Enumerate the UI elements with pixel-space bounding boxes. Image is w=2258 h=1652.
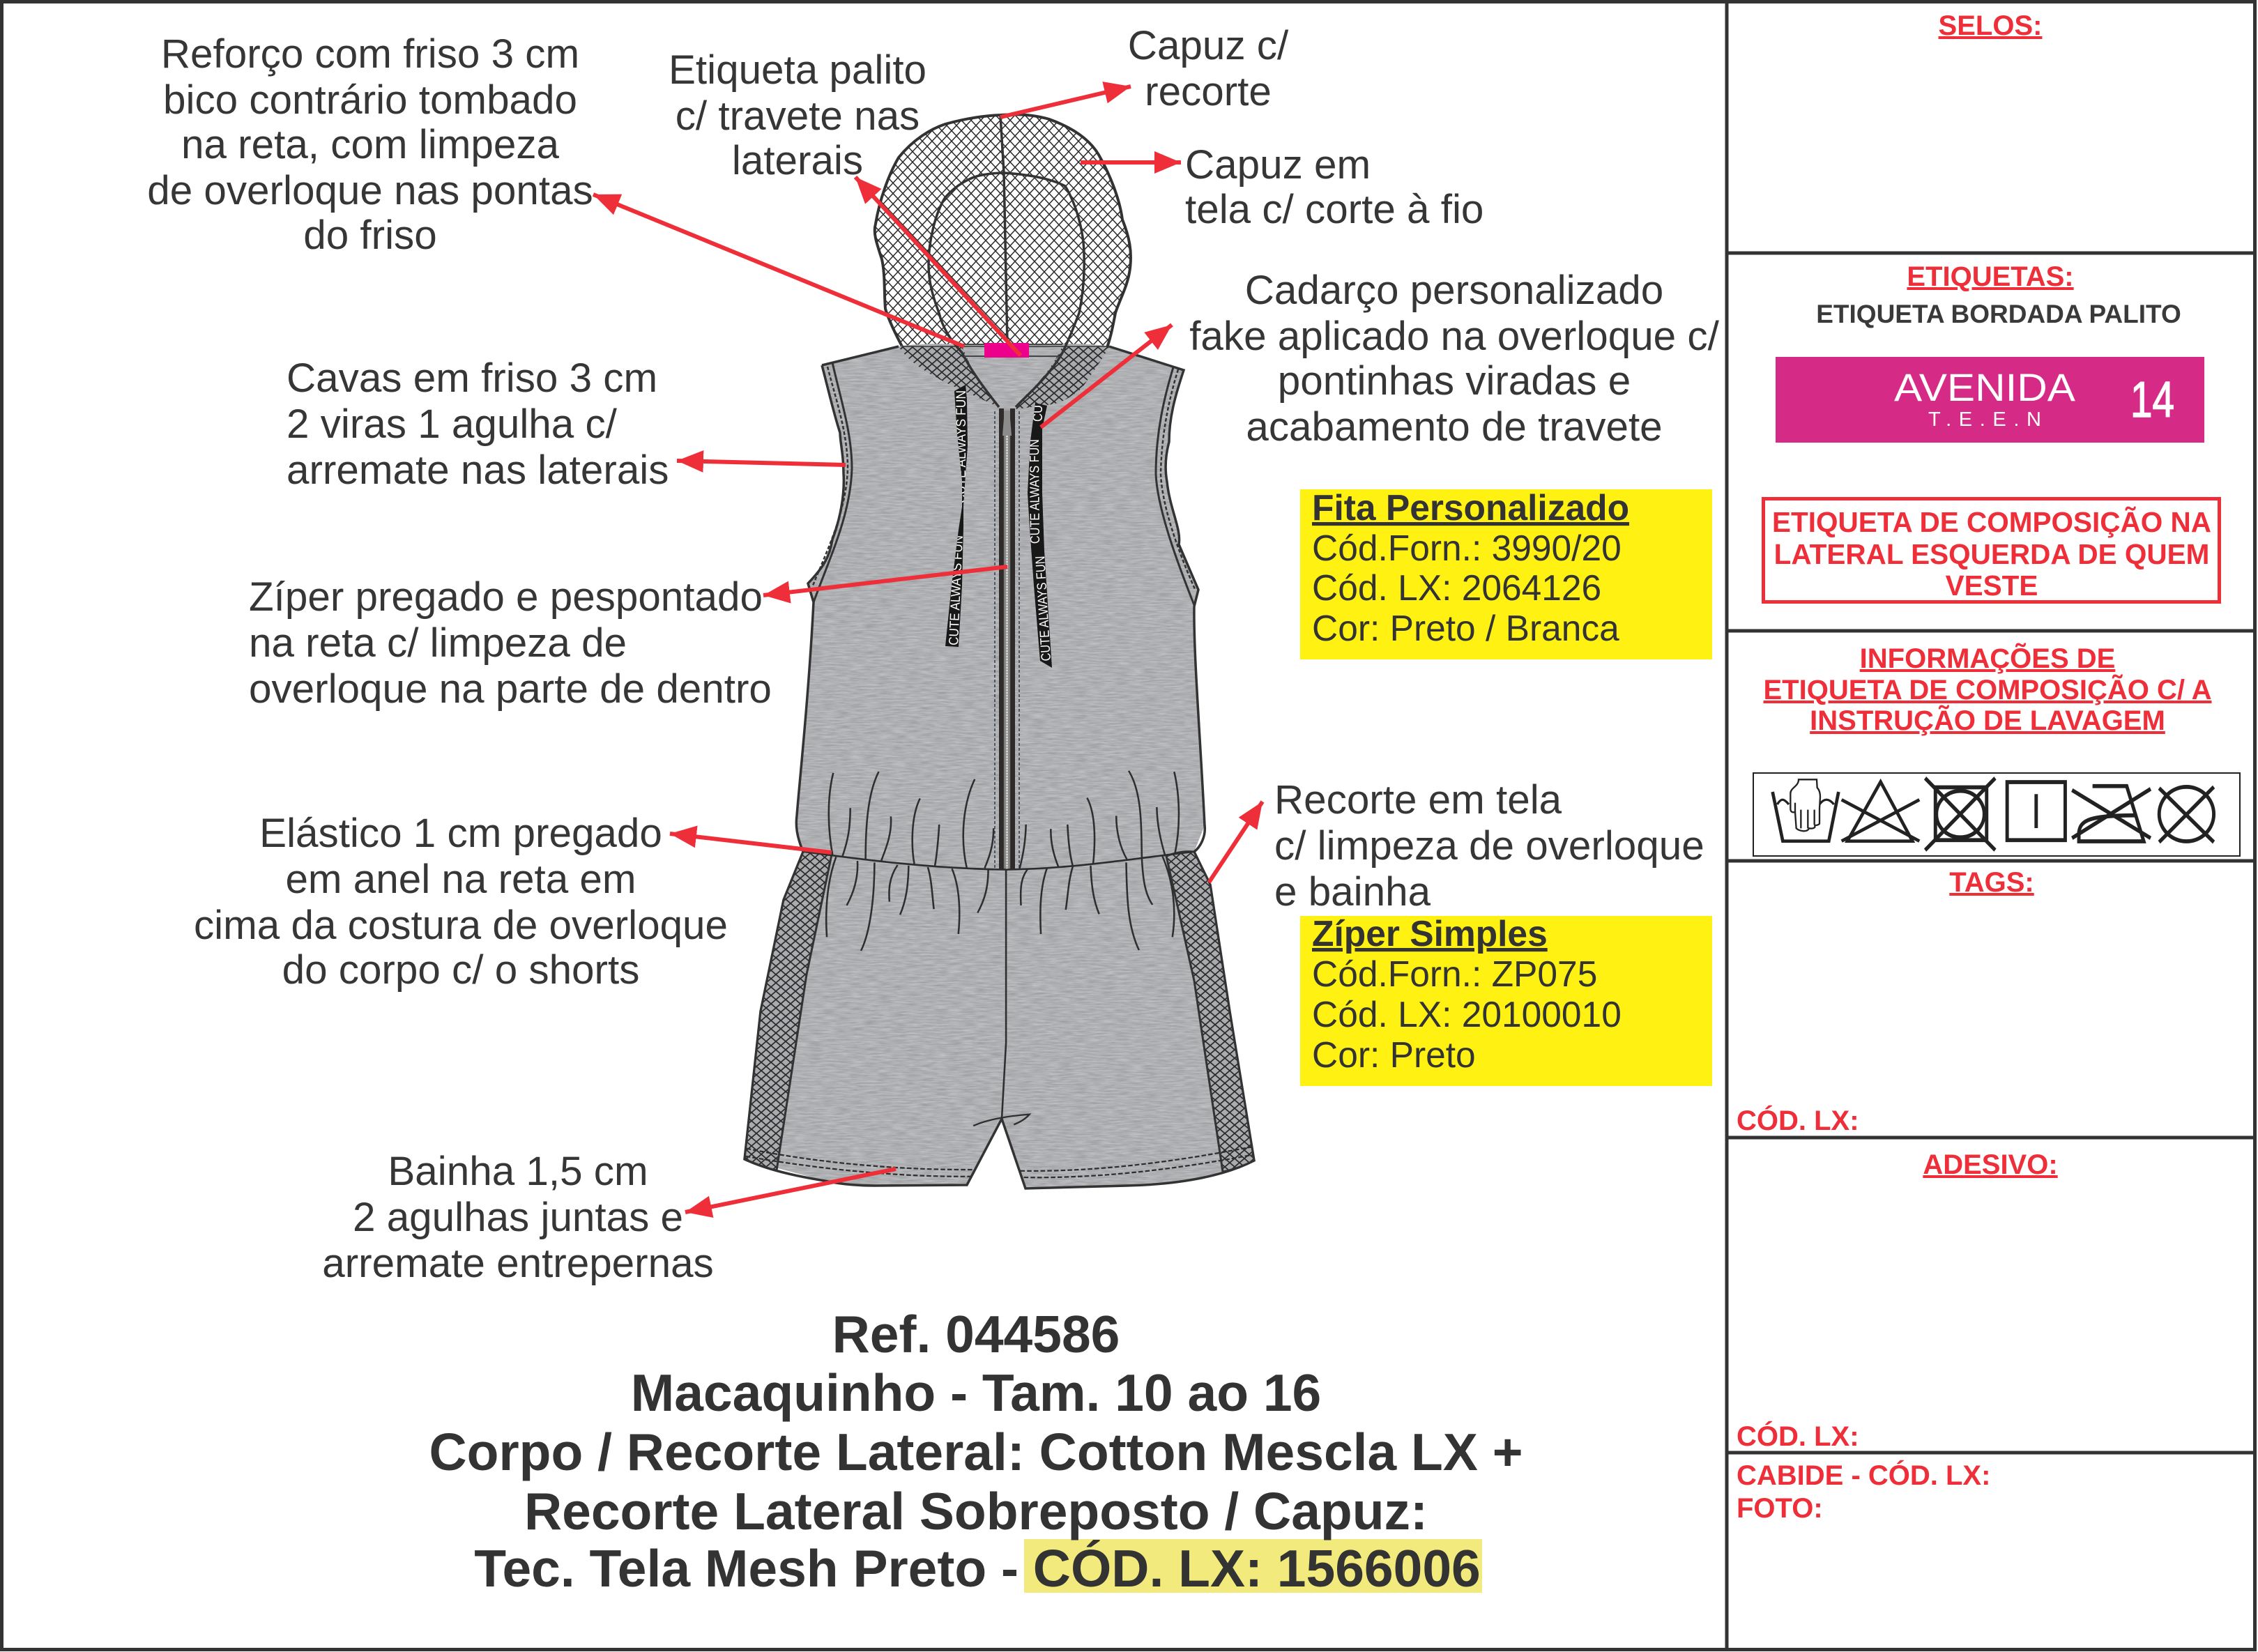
- callout: etiqueta de composição: LATERAL ESQUERDA DE QUEM: [1774, 538, 2209, 570]
- panel: zíper simples: [1300, 913, 1712, 1086]
- panel: fita personalizado: Fita Personalizado: [1312, 487, 1629, 528]
- icon: no iron: [2072, 786, 2151, 841]
- panel: fita personalizado: Cód. LX: 2064126: [1312, 567, 1601, 608]
- panel: zíper simples: Cód.Forn.: ZP075: [1312, 954, 1597, 994]
- title text: Macaquinho - Tam. 10 ao 16: [631, 1363, 1321, 1422]
- shorts side mesh panels: [745, 850, 1254, 1172]
- callout: etiqueta palito: c/ travete nas: [676, 93, 920, 139]
- callout: etiqueta palito: Etiqueta palito: [669, 47, 926, 93]
- callout: reforço com friso: bico contrário tombado: [163, 77, 577, 123]
- callout: elástico: em anel na reta em: [285, 857, 636, 902]
- field: cabide e foto: CABIDE - CÓD. LX:: [1737, 1459, 1990, 1491]
- hood: [875, 114, 1131, 409]
- callout: capuz recorte: recorte: [1145, 69, 1272, 114]
- drawstring left: CUTE ALWAYS FUN: [947, 535, 966, 645]
- title text: Recorte Lateral Sobreposto / Capuz:: [524, 1482, 1428, 1540]
- brand label: avenida teen: [1776, 357, 2204, 443]
- pink neck label: [984, 343, 1029, 358]
- callout: cadarço: pontinhas viradas e: [1278, 358, 1631, 404]
- callout: zíper: na reta c/ limpeza de: [249, 620, 627, 666]
- heading: informações de etiqueta: ETIQUETA DE COMPOSIÇÃO C/ A: [1764, 673, 2211, 705]
- callout: bainha: Bainha 1,5 cm: [388, 1149, 648, 1194]
- brand label: avenida teen: 14: [2130, 372, 2174, 428]
- hood opening and collar: [899, 115, 1109, 409]
- callout: elástico: do corpo c/ o shorts: [282, 947, 639, 993]
- callout: capuz recorte: Capuz c/: [1128, 23, 1289, 68]
- callout: etiqueta de composição: [1764, 499, 2220, 602]
- callout: capuz em tela: tela c/ corte à fio: [1185, 187, 1483, 232]
- zipper: [995, 408, 1019, 870]
- field: cód lx adesivo: CÓD. LX:: [1737, 1420, 1859, 1452]
- callout: reforço com friso: na reta, com limpeza: [181, 122, 560, 167]
- body outline: [796, 346, 1205, 852]
- callout: etiqueta de composição: ETIQUETA DE COMPOSIÇÃO NA: [1772, 506, 2211, 538]
- heading: etiquetas: ETIQUETAS:: [1907, 261, 2074, 292]
- panel: fita personalizado: Cor: Preto / Branca: [1312, 608, 1619, 648]
- callout: etiqueta palito: laterais: [732, 138, 863, 183]
- callout: reforço com friso: Reforço com friso 3 cm: [161, 31, 579, 77]
- panel: zíper simples: Cód. LX: 20100010: [1312, 994, 1622, 1034]
- icon: no dry clean: [2159, 787, 2214, 842]
- callout: bainha: 2 agulhas juntas e: [353, 1195, 683, 1240]
- title block: [429, 1305, 1523, 1598]
- red annotation arrows: [593, 86, 1263, 1212]
- callout: zíper: Zíper pregado e pespontado: [249, 574, 763, 620]
- panel: zíper simples: Zíper Simples: [1312, 913, 1548, 954]
- brand label: avenida teen: AVENIDA: [1894, 365, 2076, 409]
- field: cód lx tags: CÓD. LX:: [1737, 1104, 1859, 1136]
- drawstring right: [1028, 403, 1054, 668]
- title text: Tec. Tela Mesh Preto - CÓD. LX: 1566006: [474, 1539, 1481, 1598]
- icon: no tumble dry: [1925, 778, 1995, 850]
- callout: recorte em tela: e bainha: [1274, 869, 1431, 915]
- callout: elástico: Elástico 1 cm pregado: [259, 811, 662, 856]
- title text: Corpo / Recorte Lateral: Cotton Mescla LX +: [429, 1423, 1523, 1481]
- drawstring left: [945, 385, 969, 647]
- callout: elástico: cima da costura de overloque: [194, 903, 728, 948]
- icon: hand wash: [1773, 779, 1838, 841]
- garment illustration: [745, 114, 1254, 1188]
- callout: reforço com friso: do friso: [303, 213, 437, 258]
- drawstring left: CUTE ALWAYS FUN: [954, 390, 969, 503]
- panel: fita personalizado: [1300, 487, 1712, 659]
- callout: bainha: arremate entrepernas: [322, 1241, 714, 1286]
- heading: adesivo: ADESIVO:: [1923, 1149, 2058, 1180]
- field: cabide e foto: FOTO:: [1737, 1493, 1823, 1524]
- heading: tags: TAGS:: [1949, 867, 2034, 898]
- title text: Ref. 044586: [832, 1305, 1120, 1363]
- callout: cavas: arremate nas laterais: [287, 448, 669, 493]
- callout: cadarço: fake aplicado na overloque c/: [1189, 314, 1720, 359]
- brand label: avenida teen: T.E.E.N: [1928, 408, 2041, 431]
- heading: informações de etiqueta: INSTRUÇÃO DE LAVAGEM: [1810, 704, 2165, 736]
- icon: line dry: [2007, 782, 2065, 840]
- callout: capuz em tela: Capuz em: [1185, 142, 1371, 188]
- callout: recorte em tela: c/ limpeza de overloque: [1274, 823, 1704, 869]
- panel: fita personalizado: Cód.Forn.: 3990/20: [1312, 528, 1622, 568]
- callout: recorte em tela: Recorte em tela: [1274, 777, 1562, 823]
- callout: cavas: 2 viras 1 agulha c/: [287, 401, 618, 447]
- callout: zíper: overloque na parte de dentro: [249, 666, 772, 712]
- code highlight: [1024, 1539, 1482, 1593]
- drawstring right: CU: [1031, 405, 1046, 422]
- callout: reforço com friso: de overloque nas pontas: [147, 168, 593, 213]
- callout: cadarço: Cadarço personalizado: [1245, 268, 1663, 313]
- waist seam and gathers: [803, 771, 1194, 1126]
- washing care symbols: [1753, 773, 2240, 856]
- icon: no bleach: [1842, 782, 1919, 841]
- hem stitching: [746, 1147, 1253, 1177]
- callout: etiqueta de composição: VESTE: [1946, 569, 2038, 602]
- heading: informações de etiqueta: INFORMAÇÕES DE: [1860, 642, 2115, 674]
- drawstring right: CUTE ALWAYS FUN: [1028, 439, 1043, 544]
- body fabric: [745, 344, 1254, 1188]
- heading: selos: SELOS:: [1939, 10, 2042, 41]
- callout: cavas: Cavas em friso 3 cm: [287, 355, 657, 401]
- shorts outline: [745, 852, 1254, 1188]
- callout: cadarço: acabamento de travete: [1246, 404, 1663, 450]
- armhole seams: [814, 362, 1194, 605]
- drawstring right: CUTE ALWAYS FUN: [1033, 556, 1054, 661]
- panel: zíper simples: Cor: Preto: [1312, 1034, 1476, 1075]
- subheading: etiqueta bordada palito: ETIQUETA BORDADA PALITO: [1816, 300, 2181, 328]
